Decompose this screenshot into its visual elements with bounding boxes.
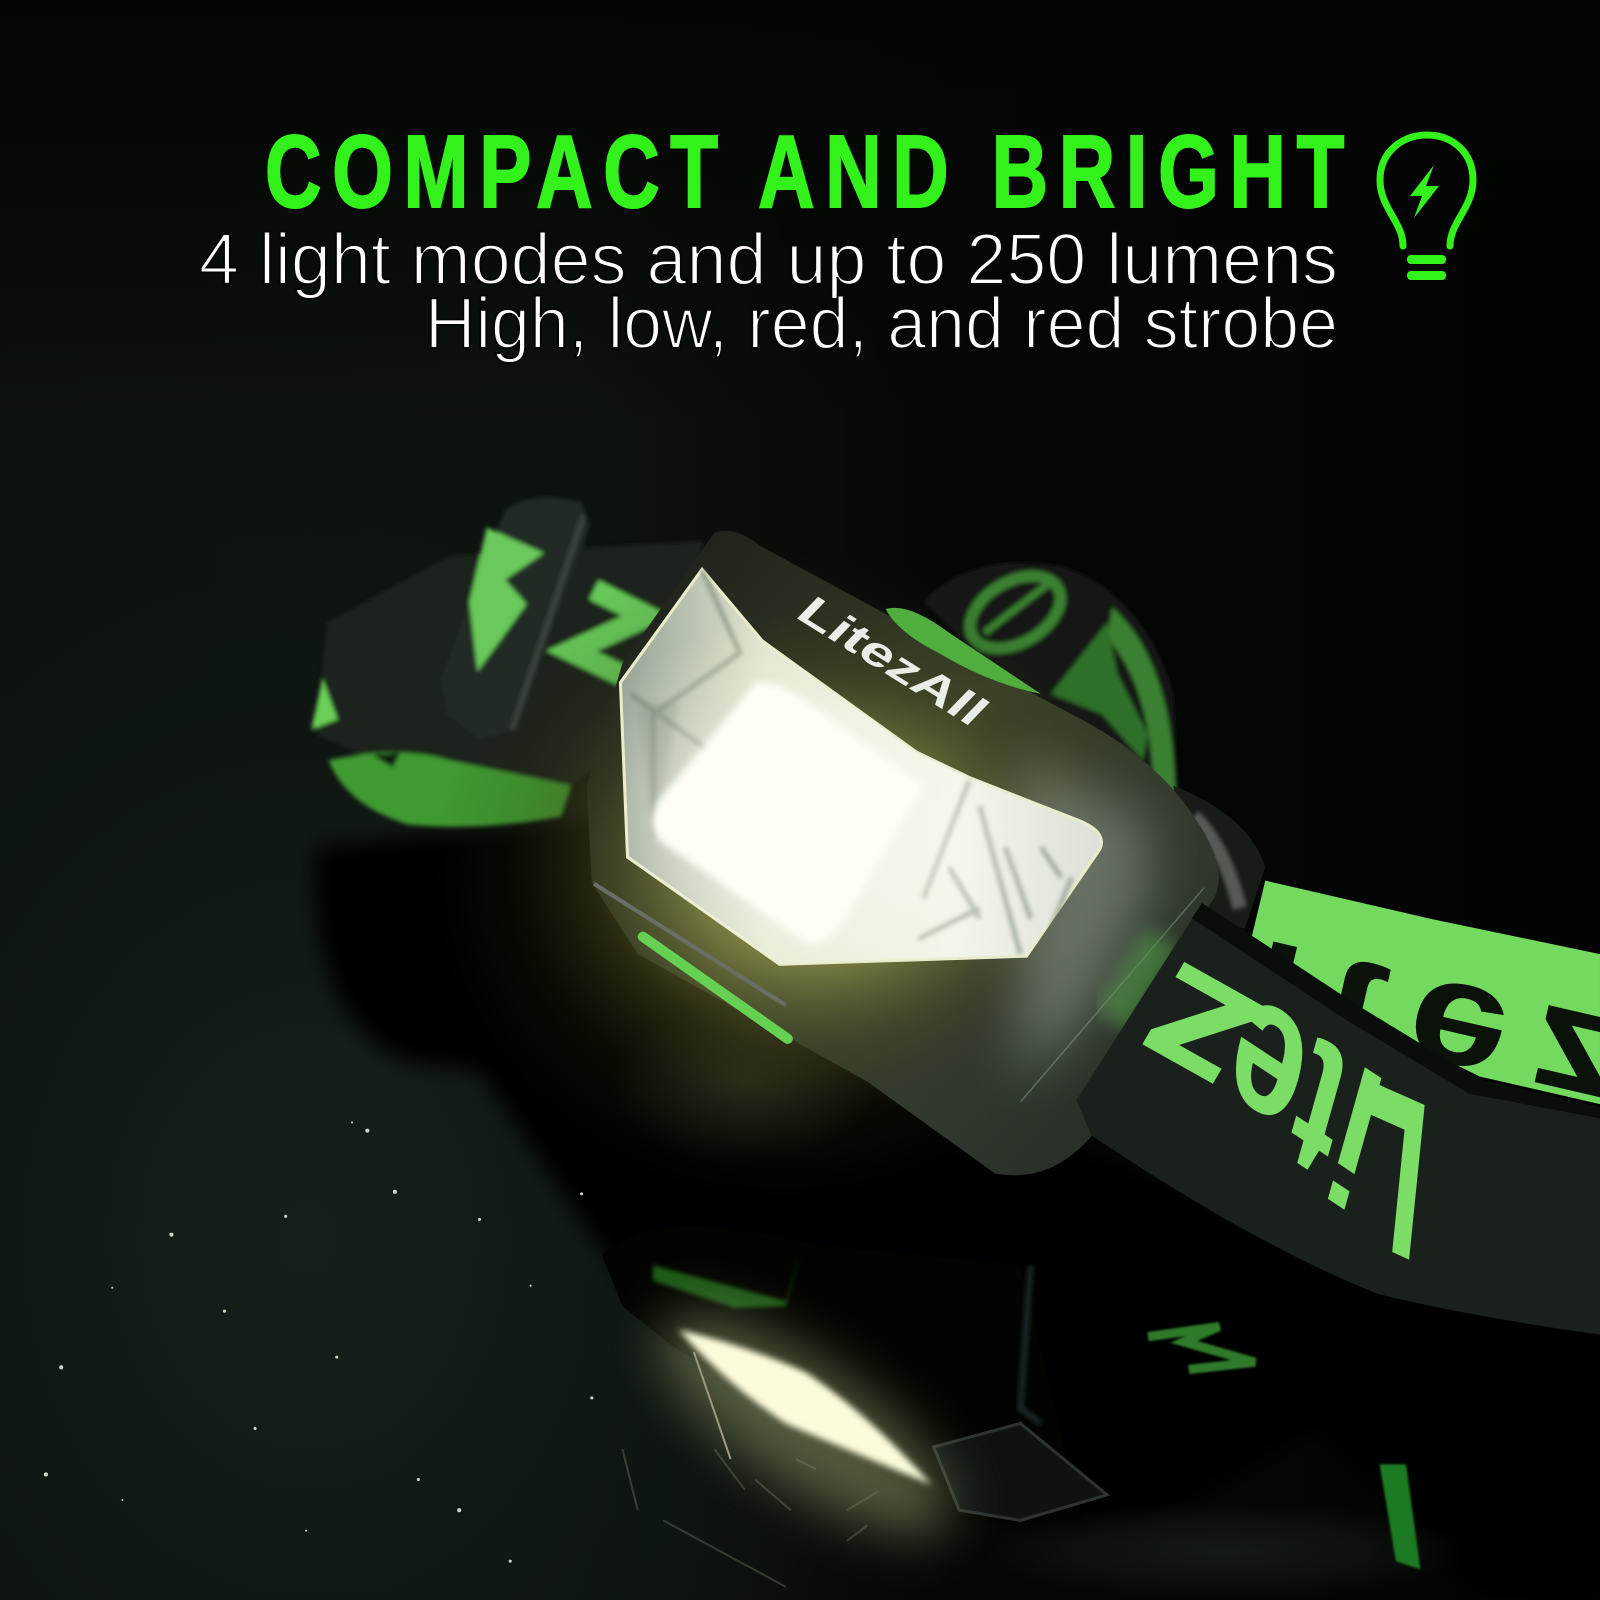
olive slab beneath the lamp	[612, 1000, 878, 1163]
subtitle line one: 4 light modes and up to 250 lumens	[199, 220, 1338, 300]
strap loop behind body	[1173, 786, 1265, 929]
headlamp body	[510, 531, 1219, 1175]
reflection of the lamp on the surface	[602, 1227, 1420, 1573]
left strap	[311, 497, 704, 827]
surface scratches near reflection	[622, 1449, 878, 1587]
strap mark: left Z	[571, 590, 647, 676]
dust specks on the surface	[44, 1121, 593, 1563]
reflection glow	[629, 1274, 983, 1573]
front strap with lettering	[1077, 903, 1600, 1335]
lens window	[618, 566, 1103, 966]
subtitle line two: High, low, red, and red strobe	[425, 284, 1338, 364]
rear strap band in green	[1231, 881, 1600, 1160]
rear round strap section	[923, 561, 1179, 806]
green lower leaf	[329, 753, 571, 827]
shadow beneath the lamp	[315, 816, 1600, 1600]
reflection lens	[934, 1423, 1107, 1520]
front strap letter z: z	[1099, 926, 1289, 1146]
front strap letter L: L	[1353, 1040, 1433, 1302]
body sheen near lens	[1020, 755, 1153, 1082]
surface sheen bottom right	[980, 1502, 1469, 1600]
COB LED bright panel	[652, 683, 922, 944]
lower trim line	[594, 884, 786, 1005]
lens glow	[624, 648, 1010, 964]
icon: light bulb with bolt	[1380, 135, 1473, 280]
upper green button	[886, 608, 1041, 694]
lower green slit	[643, 937, 788, 1039]
body glow	[510, 602, 1122, 1112]
glow halo	[429, 551, 1143, 1204]
bright reflected light	[679, 1330, 932, 1485]
brand logo on the lamp: LitezAll	[787, 589, 998, 734]
strap mark: chevron	[469, 528, 544, 671]
front strap letters ite: ite	[1203, 952, 1401, 1248]
reflected strap lettering	[1148, 1327, 1255, 1369]
